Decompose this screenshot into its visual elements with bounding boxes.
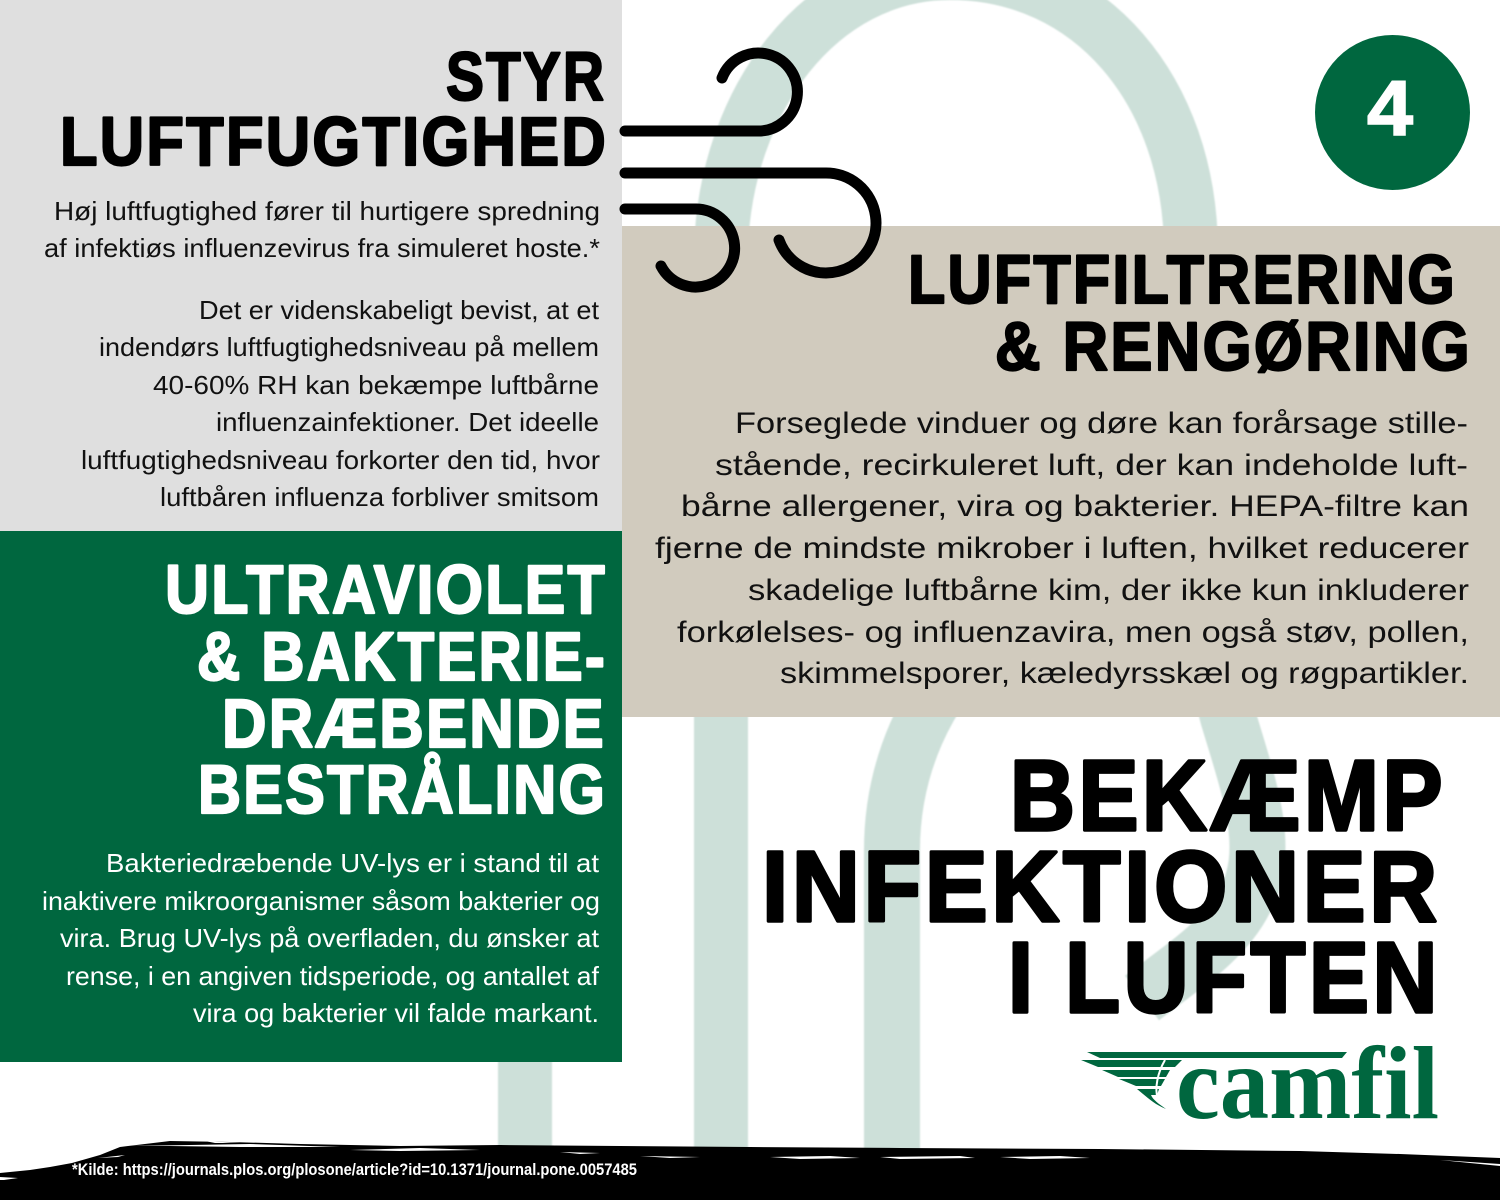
heading: styr luftfugtighed: LUFTFUGTIGHED xyxy=(60,103,608,180)
text block: humidity details: 40-60% RH kan bekæmpe luftbårne xyxy=(153,370,599,400)
title: INFEKTIONER xyxy=(762,831,1441,943)
text block: humidity intro: af infektiøs influenzevirus fra simuleret hoste.* xyxy=(44,233,600,263)
source note: *Kilde: https://journals.plos.org/plosone/article?id=10.1371/journal.pone.0057485 xyxy=(72,1161,637,1179)
heading: ultraviolet xyxy=(165,551,607,828)
text block: air filtration: bårne allergener, vira og bakterier. HEPA-filtre kan xyxy=(681,490,1469,523)
text block: humidity details: influenzainfektioner. Det ideelle xyxy=(216,407,599,437)
text block: uv light: inaktivere mikroorganismer såsom bakterier og xyxy=(42,886,600,916)
text block: air filtration xyxy=(655,407,1469,690)
title: BEKÆMP xyxy=(1010,740,1446,852)
text block: air filtration: fjerne de mindste mikrober i luften, hvilket reducerer xyxy=(655,532,1469,565)
text block: air filtration: stående, recirkuleret luft, der kan indeholde luft- xyxy=(715,449,1468,482)
badge: number 4: 4 xyxy=(1367,64,1413,152)
text block: humidity details: luftfugtighedsniveau forkorter den tid, hvor xyxy=(81,445,600,475)
heading: ultraviolet: & BAKTERIE- xyxy=(197,618,607,695)
brush streaks xyxy=(0,1141,1500,1180)
heading: styr luftfugtighed xyxy=(60,38,608,180)
text block: air filtration: Forseglede vinduer og døre kan forårsage stille- xyxy=(735,407,1468,440)
panel: ultraviolet xyxy=(0,531,622,1062)
text block: air filtration: forkølelses- og influenzavira, men også støv, pollen, xyxy=(677,616,1469,649)
heading: ultraviolet: DRÆBENDE xyxy=(222,685,606,762)
panel: styr luftfugtighed xyxy=(0,0,622,531)
text block: humidity details: luftbåren influenza forbliver smitsom xyxy=(160,482,599,512)
text block: uv light: vira og bakterier vil falde markant. xyxy=(193,998,599,1028)
background arches xyxy=(525,0,1257,1160)
icon: wind xyxy=(625,53,876,287)
text block: air filtration: skimmelsporer, kæledyrsskæl og røgpartikler. xyxy=(780,657,1469,690)
text block: humidity intro xyxy=(44,196,600,263)
logo: camfil: camfil xyxy=(1176,1026,1439,1141)
text block: humidity details: indendørs luftfugtighedsniveau på mellem xyxy=(99,332,599,362)
badge: number 4 xyxy=(1315,35,1470,190)
text block: humidity details: Det er videnskabeligt bevist, at et xyxy=(199,295,600,325)
heading: ultraviolet: ULTRAVIOLET xyxy=(165,551,607,628)
panel: luftfiltrering xyxy=(622,226,1500,717)
text block: uv light: rense, i en angiven tidsperiode, og antallet af xyxy=(66,961,600,991)
heading: luftfiltrering og rengøring xyxy=(908,241,1472,385)
heading: ultraviolet: BESTRÅLING xyxy=(198,751,607,828)
text block: humidity intro: Høj luftfugtighed fører til hurtigere spredning xyxy=(54,196,600,226)
text block: uv light xyxy=(42,848,600,1028)
footer brush band xyxy=(0,1141,1500,1200)
text block: air filtration: skadelige luftbårne kim, der ikke kun inkluderer xyxy=(748,574,1469,607)
title xyxy=(762,740,1446,1034)
text block: uv light: vira. Brug UV-lys på overfladen, du ønsker at xyxy=(60,923,600,953)
text block: uv light: Bakteriedræbende UV-lys er i stand til at xyxy=(106,848,600,878)
text block: humidity details xyxy=(81,295,600,512)
title: I LUFTEN xyxy=(1008,922,1441,1034)
heading: styr luftfugtighed: STYR xyxy=(446,38,606,115)
